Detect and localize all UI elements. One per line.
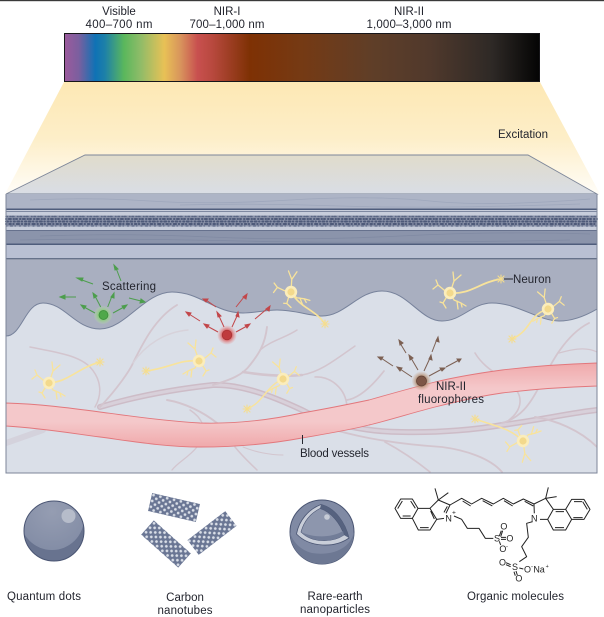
excitation light beam [5, 82, 600, 194]
organic molecule structure: Na [533, 564, 545, 574]
organic molecule structure: - [531, 565, 533, 571]
tissue layers [6, 194, 598, 259]
label: visible: 400–700 nm [86, 19, 152, 31]
neuron 4 [269, 268, 329, 328]
label: NIR-II fluorophores: fluorophores [418, 394, 484, 406]
excitation label: Excitation [498, 129, 548, 141]
deep tissue panel [6, 259, 597, 473]
organic molecule structure: O [506, 534, 513, 544]
label: carbon nanotubes: Carbon [166, 592, 204, 604]
blood vessel [6, 363, 597, 447]
label: rare-earth nanoparticles: Rare-earth [308, 591, 362, 603]
label: carbon nanotubes: nanotubes [158, 605, 213, 617]
granular layer [6, 216, 597, 226]
label: scattering: Scattering [102, 281, 156, 293]
shell band [296, 504, 349, 545]
background vessels [6, 305, 597, 472]
neuron 6 [508, 289, 564, 343]
organic molecule structure: O [515, 574, 522, 584]
label: neuron with leader: Neuron [513, 274, 551, 286]
neuron 3 [243, 359, 299, 413]
organic molecule structure: - [506, 545, 508, 551]
upper dark tissue layer [6, 259, 597, 336]
label: rare-earth nanoparticles: nanoparticles [300, 604, 370, 616]
quantum dot sphere [24, 500, 84, 562]
red fluorophore with scattering arrows [186, 294, 270, 344]
label: NIR-II [366, 6, 452, 31]
carbon nanotubes [141, 493, 237, 568]
label: NIR-II: 1,000–3,000 nm [366, 19, 452, 31]
inner core [301, 508, 344, 541]
label: visible: Visible [102, 6, 136, 18]
organic molecule structure: + [452, 510, 456, 517]
label: quantum dots: Quantum dots [7, 591, 81, 603]
label: carbon nanotubes [158, 592, 213, 617]
label: NIR-I: 700–1,000 nm [190, 19, 264, 31]
shell dark wedge [320, 504, 349, 538]
green fluorophore with scattering arrows [60, 265, 145, 324]
organic molecule structure: + [546, 564, 549, 570]
label: NIR-I: NIR-I [214, 6, 240, 18]
spectrum labels [86, 6, 452, 31]
organic molecule structure: O [500, 521, 507, 531]
organic molecule structure: N [531, 513, 537, 523]
tissue top surface [6, 155, 597, 194]
neuron 2 [142, 340, 216, 377]
organic molecule structure [395, 487, 590, 584]
organic molecule structure: O [499, 544, 506, 554]
neuron 5 [433, 272, 505, 309]
neuron 1 [32, 358, 104, 399]
NIR-II fluorophore with arrows [378, 337, 461, 390]
organic molecule structure: N [445, 513, 452, 523]
label: visible [86, 6, 152, 31]
spectrum bar [64, 34, 540, 82]
label: NIR-II: NIR-II [394, 6, 424, 18]
label: NIR-II fluorophores [418, 381, 484, 406]
rare-earth nanoparticle [290, 500, 354, 564]
label: blood vessels with leader [300, 435, 369, 460]
neuron 7 [471, 415, 542, 464]
top rule [0, 0, 604, 1]
organic molecule structure: O [524, 564, 531, 574]
organic molecule structure: S [494, 534, 500, 544]
frame of tissue panel [6, 259, 597, 473]
label: NIR-II fluorophores: NIR-II [436, 381, 466, 393]
label: rare-earth nanoparticles [300, 591, 370, 616]
label: blood vessels with leader: Blood vessels [300, 448, 369, 460]
organic molecule structure: S [512, 562, 518, 572]
label: organic molecules: Organic molecules [467, 591, 564, 603]
label: NIR-I [190, 6, 264, 31]
organic molecule structure: O [499, 558, 506, 568]
